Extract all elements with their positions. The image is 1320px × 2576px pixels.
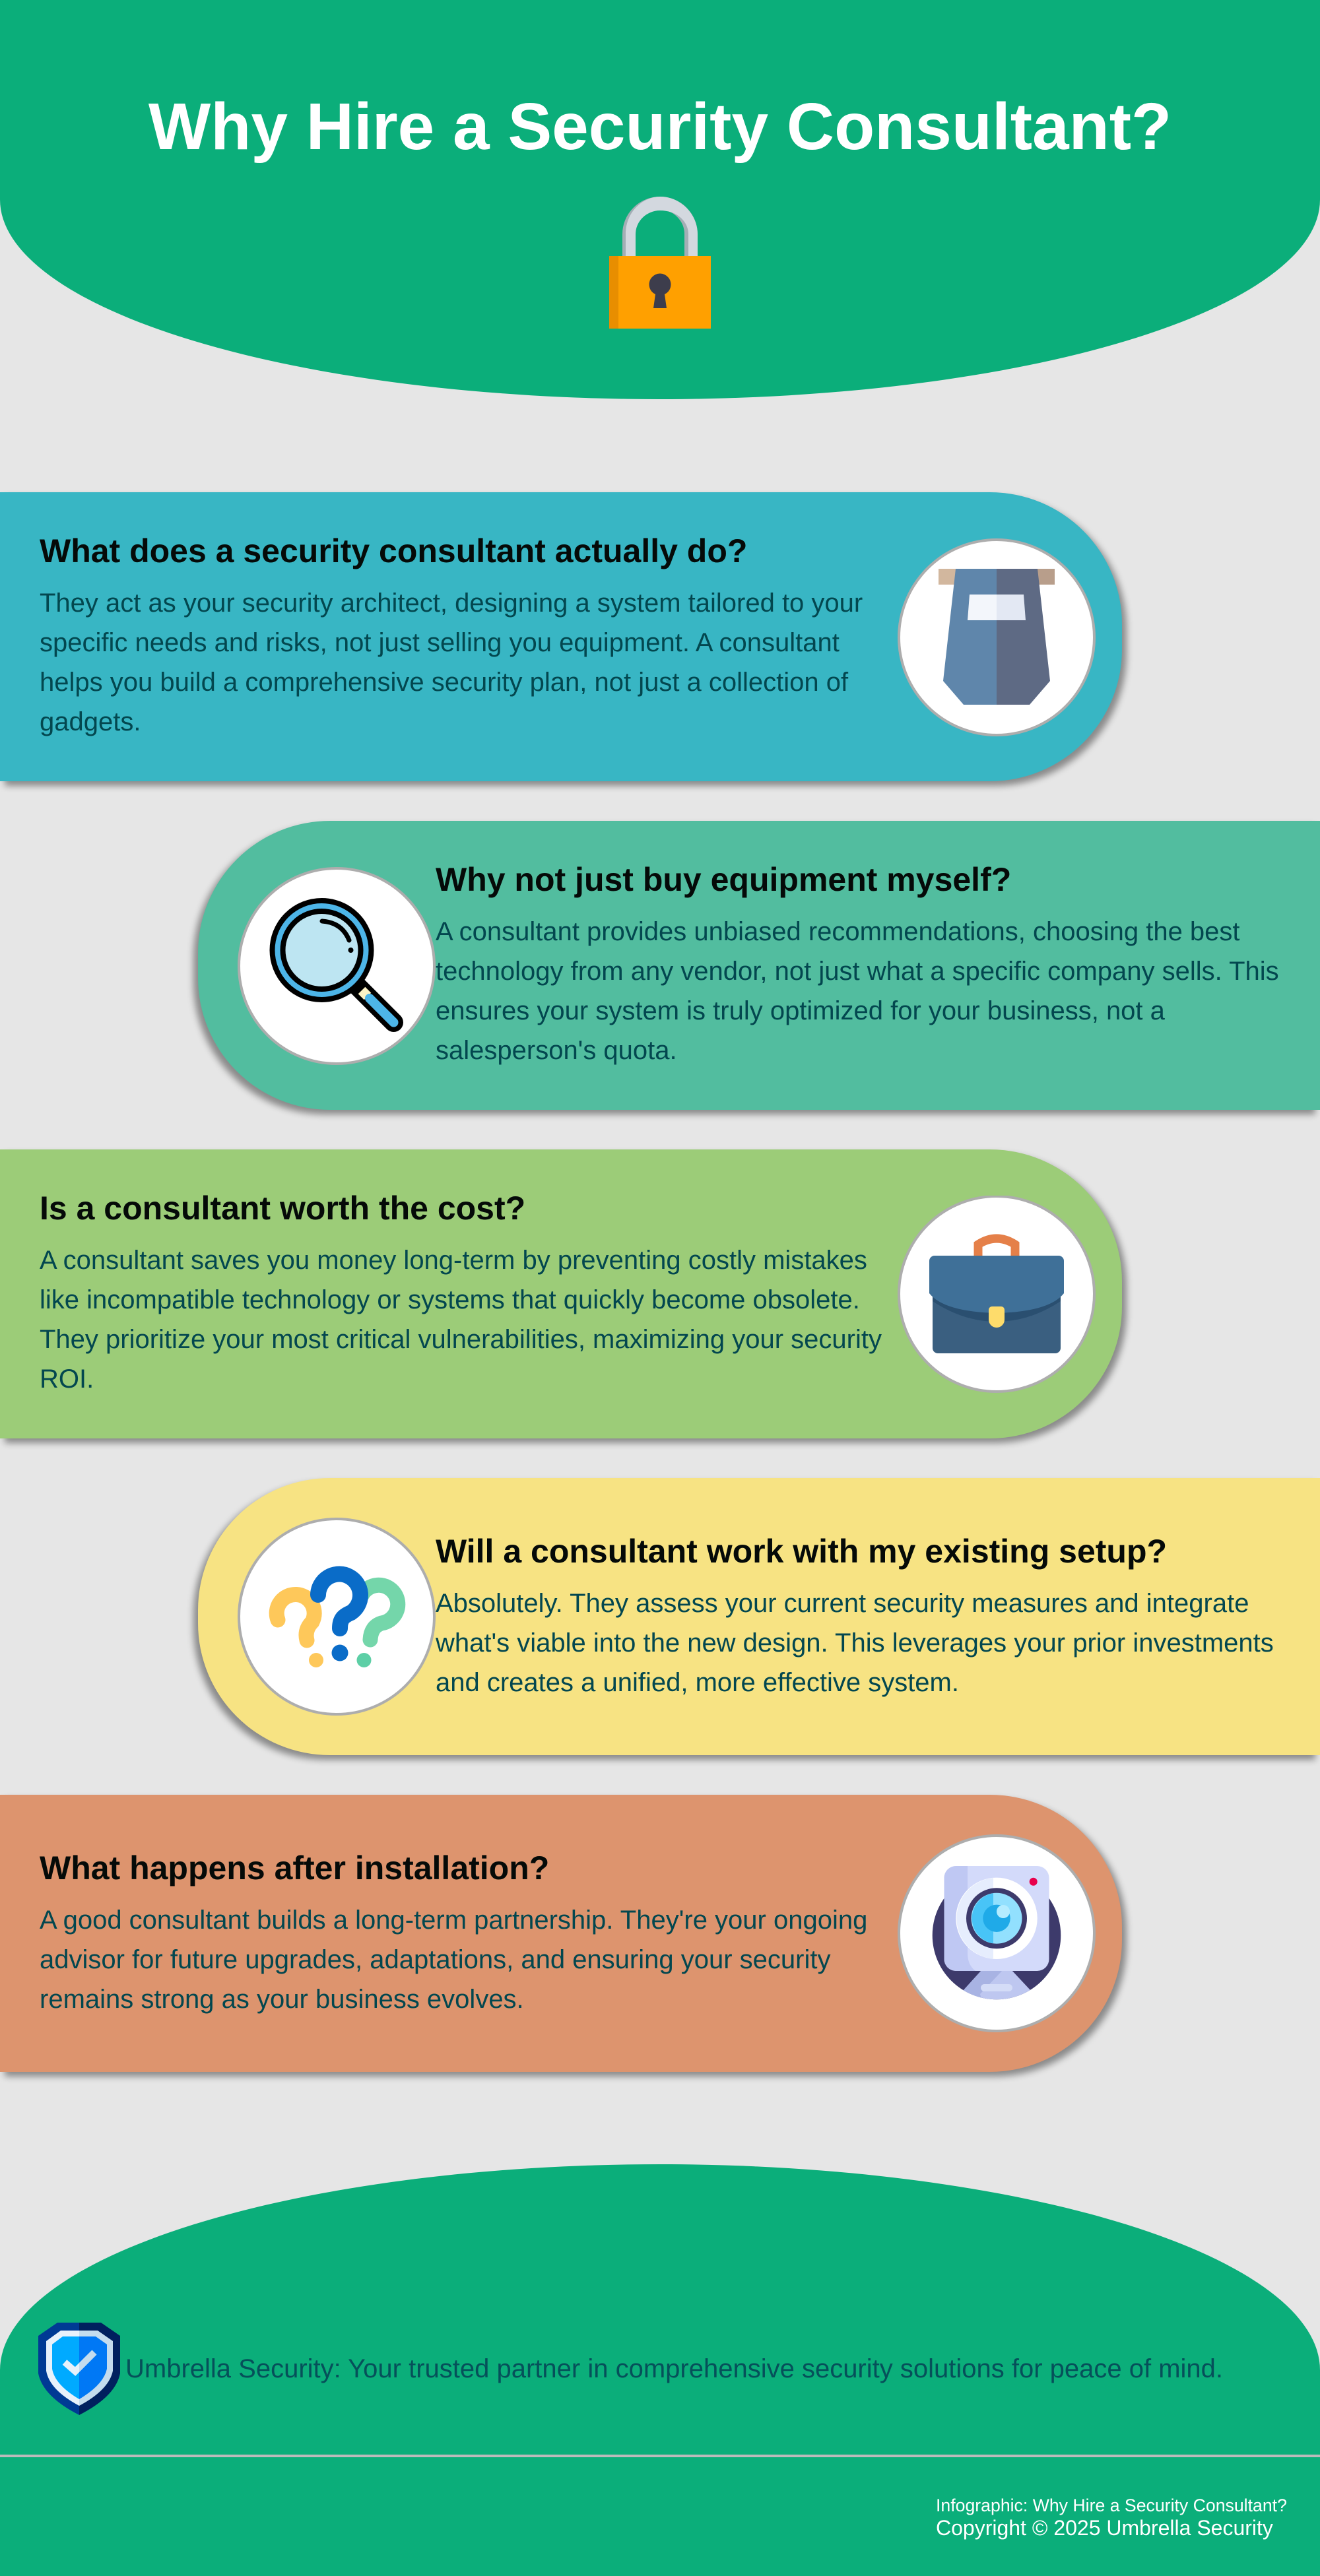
body text: A consultant saves you money long-term by preventing costly mistakes: [40, 1246, 867, 1275]
body text: specific needs and risks, not just selling you equipment. A consultant: [40, 628, 840, 657]
body text: salesperson's quota.: [436, 1036, 677, 1065]
icon: padlock: [609, 197, 711, 329]
heading: Is a consultant worth the cost?: [40, 1190, 525, 1227]
body text: advisor for future upgrades, adaptations, and ensuring your security: [40, 1945, 830, 1974]
icon: magnifying glass: [238, 867, 436, 1065]
body text: helps you build a comprehensive security plan, not just a collection of: [40, 668, 848, 697]
body text: A good consultant builds a long-term partnership. They're your ongoing: [40, 1906, 867, 1935]
footer credits: Copyright © 2025 Umbrella Security: [936, 2516, 1273, 2540]
divider line: [0, 2455, 1320, 2457]
body text: They prioritize your most critical vulnerabilities, maximizing your security: [40, 1325, 882, 1354]
body text: Absolutely. They assess your current security measures and integrate: [436, 1589, 1249, 1618]
body text: ROI.: [40, 1365, 94, 1394]
panel: existing setup: [198, 1478, 1320, 1755]
body text: technology from any vendor, not just what a specific company sells. This: [436, 957, 1279, 986]
footer credits: [936, 2496, 1287, 2540]
icon: security guard vest: [898, 538, 1096, 736]
panel: after installation: [0, 1795, 1122, 2072]
footer band: [0, 2164, 1320, 2576]
body text: gadgets.: [40, 707, 141, 736]
body text: [40, 589, 863, 736]
body text: [436, 1589, 1274, 1697]
tagline: Umbrella Security: Your trusted partner in comprehensive security solutions for peace of mind.: [125, 2354, 1223, 2383]
heading: What does a security consultant actually do?: [40, 532, 747, 569]
body text: [40, 1906, 867, 2014]
heading: What happens after installation?: [40, 1850, 549, 1886]
panel: what does a consultant do: [0, 492, 1122, 781]
title: Why Hire a Security Consultant?: [148, 90, 1172, 164]
heading: Why not just buy equipment myself?: [436, 861, 1011, 898]
footer credits: Infographic: Why Hire a Security Consultant?: [936, 2496, 1287, 2515]
icon: briefcase: [898, 1196, 1096, 1393]
body text: like incompatible technology or systems that quickly become obsolete.: [40, 1285, 860, 1314]
body text: what's viable into the new design. This leverages your prior investments: [436, 1628, 1274, 1658]
body text: A consultant provides unbiased recommendations, choosing the best: [436, 917, 1240, 946]
panel: worth the cost: [0, 1149, 1122, 1438]
body text: and creates a unified, more effective system.: [436, 1668, 959, 1697]
header band: [0, 0, 1320, 399]
body text: [40, 1246, 882, 1394]
panel: why not buy equipment myself: [198, 821, 1320, 1110]
icon: security camera: [898, 1834, 1096, 2032]
body text: remains strong as your business evolves.: [40, 1985, 524, 2014]
icon: shield with check mark: [38, 2323, 120, 2415]
icon: question marks: [238, 1518, 436, 1716]
body text: ensures your system is truly optimized for your business, not a: [436, 996, 1165, 1025]
body text: [436, 917, 1279, 1065]
heading: Will a consultant work with my existing setup?: [436, 1533, 1167, 1570]
body text: They act as your security architect, designing a system tailored to your: [40, 589, 863, 618]
